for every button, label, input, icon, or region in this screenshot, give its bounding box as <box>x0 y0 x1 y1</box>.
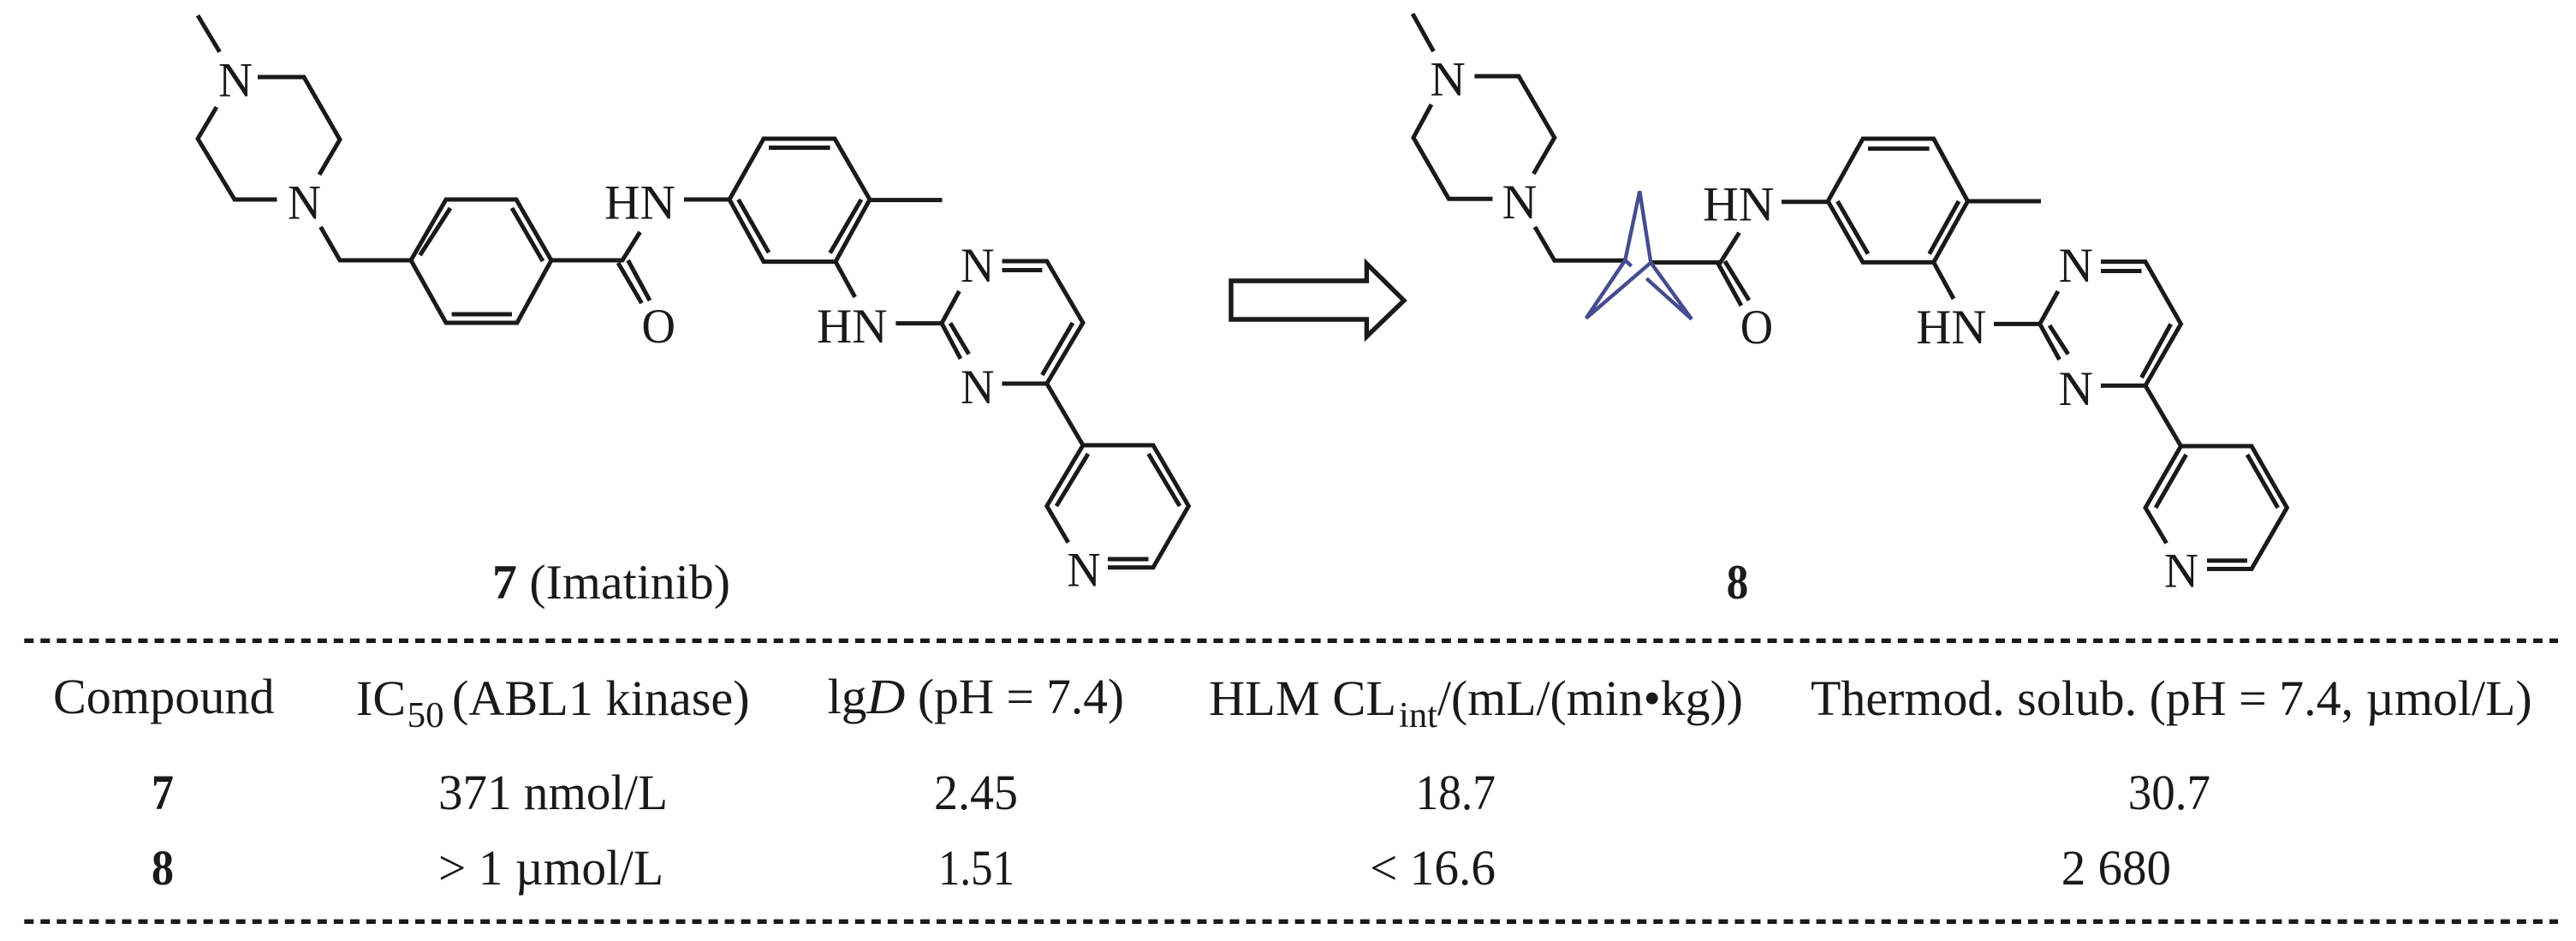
column header: lgD: (pH = 7.4) <box>918 669 1124 724</box>
row: compound 7: 371 nmol/L <box>438 765 668 820</box>
atom labels: compound 8: HN <box>1703 178 1774 232</box>
row: compound 8: > 1 µmol/L <box>438 840 663 896</box>
atom labels: compound 8: HN <box>1916 301 1986 354</box>
column header: IC50: IC <box>356 670 406 726</box>
atom labels: compound 7: O <box>642 300 675 354</box>
row: compound 7: 7 <box>152 765 174 820</box>
structure: compound 8 <box>1413 14 2287 599</box>
compound label: 8: 8 <box>1727 556 1748 610</box>
column header: IC50: 50 <box>408 696 444 736</box>
atom labels: compound 8: N <box>2164 545 2198 599</box>
atom labels: compound 7: N <box>961 239 995 293</box>
row: compound 8: 8 <box>152 840 174 896</box>
atom labels: compound 8 <box>1430 53 2198 599</box>
row: compound 8: < 16.6 <box>1370 840 1496 896</box>
column header: IC50 <box>356 670 750 736</box>
column header: lgD <box>827 669 1124 724</box>
row: compound 8 <box>152 840 2171 896</box>
column header: thermodynamic solubility: Thermod. solub. (pH = 7.4, µmol/L) <box>1811 670 2532 726</box>
column header: HLM CLint: /(mL/(min•kg)) <box>1437 670 1743 726</box>
atom labels: compound 7 <box>218 53 1101 598</box>
column header: HLM CLint <box>1209 670 1743 736</box>
atom labels: compound 8: N <box>2059 362 2093 416</box>
atom labels: compound 7: HN <box>817 300 888 354</box>
row: compound 7: 2.45 <box>934 765 1018 820</box>
arrow: transformation from 7 to 8 <box>1231 264 1404 336</box>
table: compound properties <box>24 640 2558 921</box>
bicyclopentane bioisostere (blue) <box>1586 191 1692 319</box>
bonds: compound 8 skeleton <box>1413 14 2287 569</box>
atom labels: compound 7: N <box>1067 543 1101 598</box>
row: compound 7: 18.7 <box>1416 765 1496 820</box>
atom labels: compound 7: HN <box>604 176 675 230</box>
bonds: compound 7 skeleton <box>198 15 1188 568</box>
column header: HLM CLint: int <box>1399 696 1437 736</box>
column header: lgD: D <box>866 669 906 724</box>
atom labels: compound 7: N <box>218 53 253 108</box>
row: compound 8: 1.51 <box>938 840 1014 896</box>
atom labels: compound 8: N <box>1502 176 1537 229</box>
column header: lgD: lg <box>827 669 866 724</box>
column header: IC50: (ABL1 kinase) <box>452 670 750 726</box>
column header: Compound: Compound <box>53 669 275 724</box>
compound label: 7 (Imatinib): 7 (Imatinib) <box>492 556 730 610</box>
atom labels: compound 7: N <box>288 176 321 230</box>
row: compound 7: 30.7 <box>2128 765 2210 820</box>
atom labels: compound 8: O <box>1740 301 1773 354</box>
structure: compound 7 (imatinib) <box>198 15 1188 598</box>
atom labels: compound 7: N <box>961 360 995 414</box>
row: compound 8: 2 680 <box>2061 840 2171 896</box>
atom labels: compound 8: N <box>2059 239 2093 293</box>
row: compound 7 <box>152 765 2210 820</box>
column header: HLM CLint: HLM CL <box>1209 670 1396 726</box>
atom labels: compound 8: N <box>1430 53 1466 107</box>
